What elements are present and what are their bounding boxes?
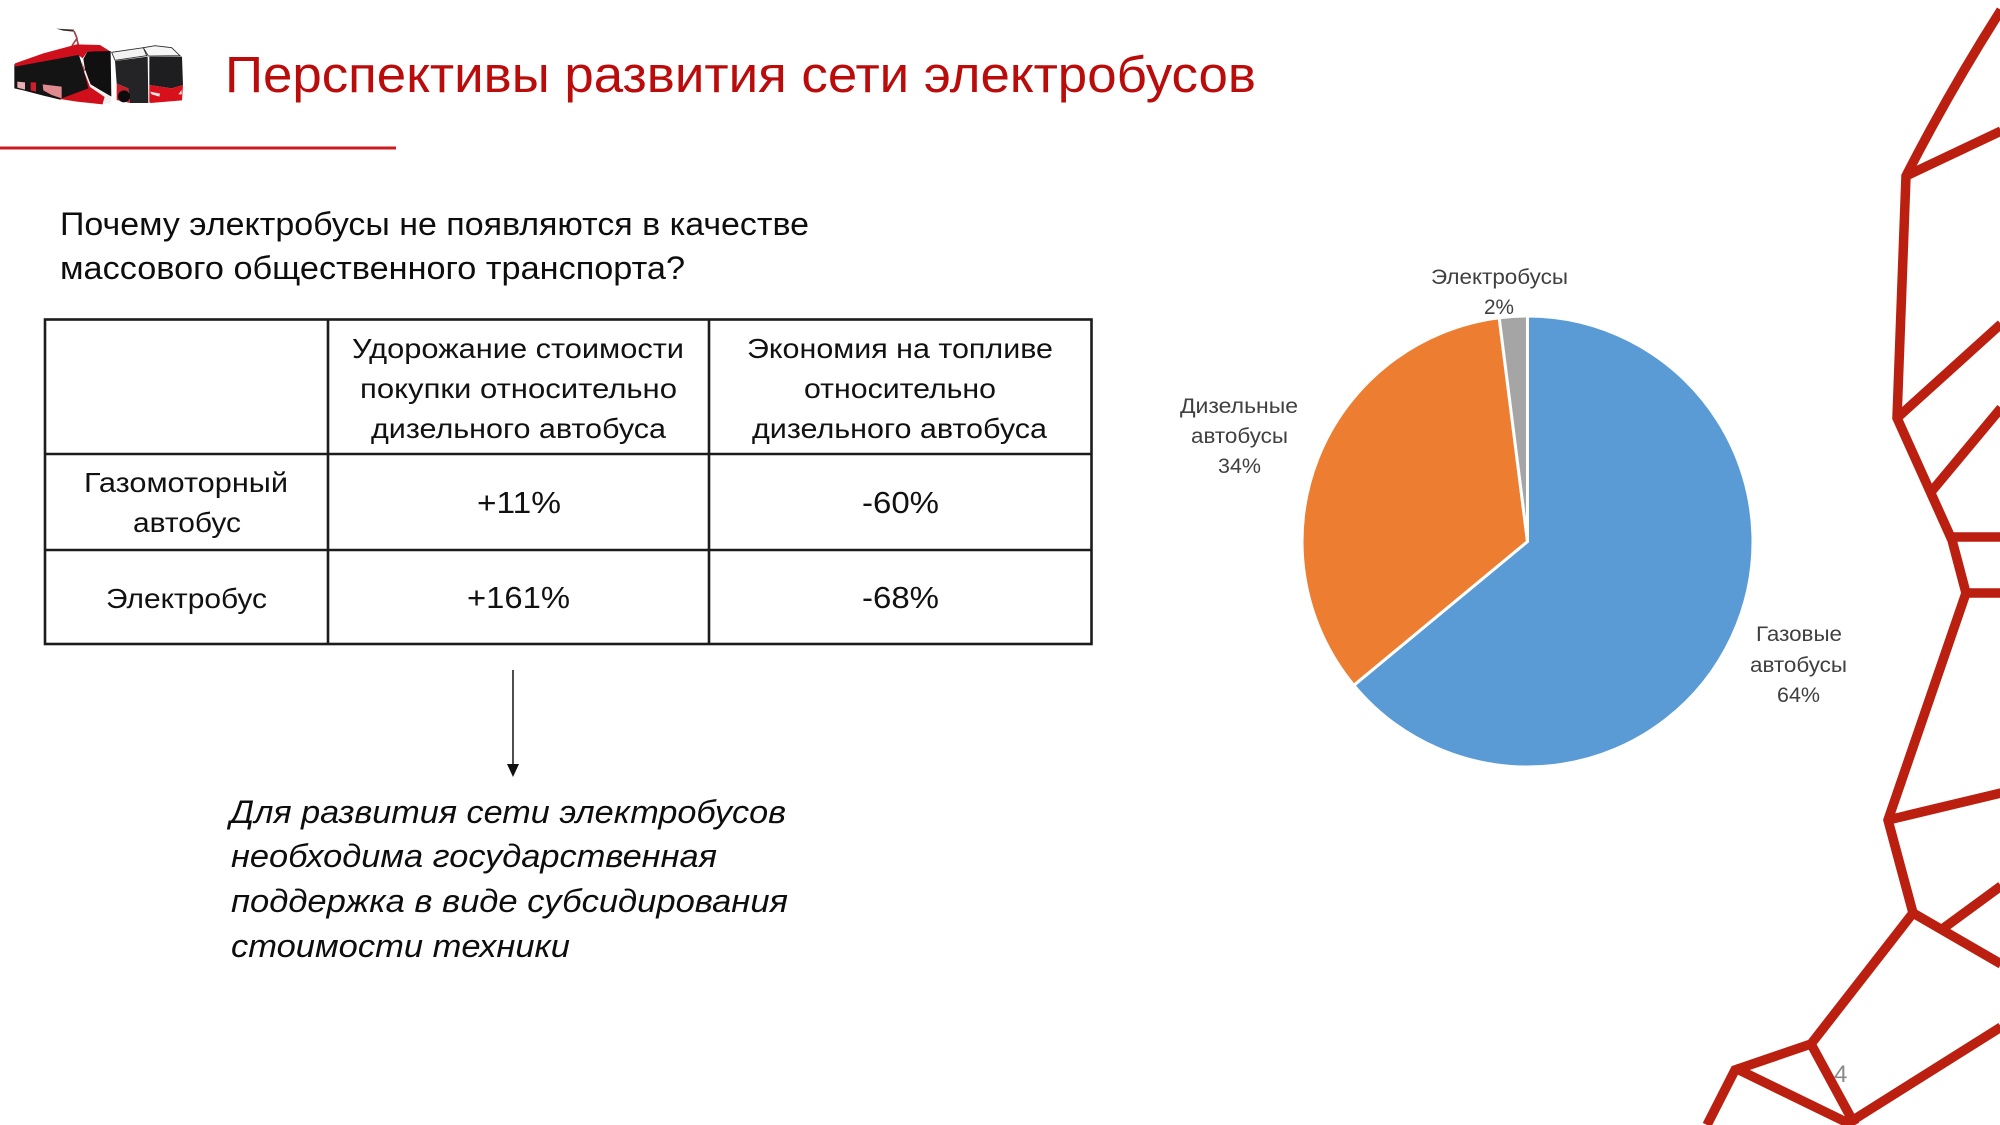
table header: cost increase: Удорожание стоимости: [352, 333, 684, 364]
pie label: diesel buses: Дизельные: [1180, 394, 1298, 418]
slice: diesel buses 34%: [1302, 318, 1528, 685]
comparison table: [45, 320, 1092, 644]
pie label: diesel buses: автобусы: [1191, 424, 1288, 448]
conclusion text: необходима государственная: [231, 838, 717, 874]
pie label: electric buses: Электробусы: [1431, 265, 1568, 289]
question heading: Почему электробусы не появляются в качестве: [60, 206, 809, 242]
table row: gas bus: -60%: [862, 485, 939, 520]
table row: gas bus: [84, 467, 939, 538]
question heading: массового общественного транспорта?: [60, 250, 685, 286]
slice: gas buses 64%: [1354, 316, 1753, 767]
table header: fuel savings: дизельного автобуса: [752, 413, 1048, 444]
title: Перспективы развития сети электробусов: [225, 46, 1256, 103]
conclusion text: стоимости техники: [231, 928, 570, 964]
electric bus: [112, 46, 183, 103]
pie label: gas buses: 64%: [1777, 683, 1820, 707]
table row: electric bus: [106, 580, 939, 615]
decorative red polygon network on the right edge: [1707, 10, 2000, 1125]
pie label: electric buses: 2%: [1484, 295, 1514, 319]
conclusion text: Для развития сети электробусов: [227, 794, 786, 830]
pie chart: bus fleet shares: [1302, 316, 1753, 767]
pie label: gas buses: Газовые: [1756, 622, 1842, 646]
table header: fuel savings: [747, 333, 1053, 444]
icon: electric bus and tram: [14, 29, 183, 104]
table header: cost increase: [352, 333, 684, 444]
pie label: electric buses: [1431, 265, 1568, 319]
table row: electric bus: -68%: [862, 580, 939, 615]
conclusion text: [227, 794, 788, 964]
table row: electric bus: +161%: [467, 580, 570, 615]
pie label: diesel buses: [1180, 394, 1298, 478]
pie label: diesel buses: 34%: [1218, 454, 1261, 478]
table row: electric bus: Электробус: [106, 583, 267, 614]
pie label: gas buses: [1750, 622, 1847, 707]
table row: gas bus: +11%: [477, 485, 561, 520]
table row: gas bus: Газомоторный: [84, 467, 288, 498]
table header: fuel savings: относительно: [804, 373, 996, 404]
table header: fuel savings: Экономия на топливе: [747, 333, 1053, 364]
table row: gas bus: автобус: [133, 507, 241, 538]
arrow down: [507, 670, 519, 777]
tram: [14, 29, 111, 104]
table header: cost increase: дизельного автобуса: [371, 413, 667, 444]
slice: electric buses 2%: [1499, 316, 1528, 542]
question heading: [60, 206, 809, 286]
table header: cost increase: покупки относительно: [360, 373, 677, 404]
pie label: gas buses: автобусы: [1750, 653, 1847, 677]
conclusion text: поддержка в виде субсидирования: [231, 883, 788, 919]
title underline: [0, 146, 396, 150]
page number: 4: [1834, 1061, 1847, 1088]
